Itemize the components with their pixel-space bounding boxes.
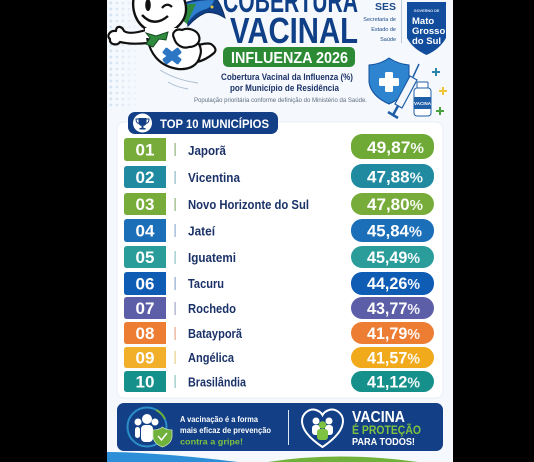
row 03: 47,80% [367, 195, 423, 214]
row 09: Angélica [188, 351, 235, 365]
left arm and hand [108, 27, 148, 44]
row 04: Jateí [188, 224, 215, 238]
row 01: 49,87% [367, 138, 424, 157]
row 01: Japorã [188, 144, 226, 158]
title: VACINAL [230, 10, 358, 51]
row 06: Tacuru [188, 277, 224, 291]
scarf [146, 32, 168, 47]
text: vacina e protecao para todos [352, 409, 421, 448]
cross on belly [162, 47, 182, 65]
row 05 [124, 246, 434, 268]
row 06 [124, 272, 434, 295]
text: vaccination message: A vacinação é a forma [180, 415, 259, 424]
row 08: 08 [136, 324, 154, 343]
text: vaccination message [180, 415, 271, 446]
row 04: 04 [136, 222, 155, 240]
row 09: 41,57% [367, 348, 420, 368]
section heading: top 10 municipios [128, 112, 278, 134]
SES logo text: Estado de [371, 27, 396, 33]
row 05: Iguatemi [188, 251, 236, 265]
row 10: 41,12% [367, 372, 420, 392]
mascot: flying vaccine drop [108, 0, 225, 89]
row 01: 01 [136, 140, 154, 160]
badge: influenza 2026: INFLUENZA 2026 [231, 50, 348, 67]
row 07: 43,77% [367, 299, 420, 318]
panel: ranking card [117, 122, 443, 398]
right foot [190, 44, 215, 62]
row 05: 45,49% [367, 248, 420, 267]
government shield [407, 2, 446, 55]
row 08 [124, 322, 434, 344]
text: vacina e protecao para todos: É PROTEÇÃO [352, 422, 421, 437]
subtitle [221, 72, 353, 94]
icon: shield, syringe and vial: VACINA [414, 101, 432, 106]
row 09: 09 [136, 348, 154, 368]
title [223, 0, 358, 51]
row 08: 41,79% [367, 324, 420, 343]
row 03: 03 [136, 195, 154, 214]
icon: shield, syringe and vial [369, 58, 432, 118]
note: População prioritária conforme definição do Ministério da Saúde. [194, 97, 367, 104]
section heading: top 10 municipios: TOP 10 MUNICÍPIOS [160, 116, 269, 131]
government shield: do Sul [412, 36, 441, 47]
government shield: GOVERNO DE [414, 9, 440, 13]
text: vaccination message: mais eficaz de prevenção [180, 426, 271, 435]
row 02: 47,88% [367, 168, 423, 186]
row 02: 02 [136, 168, 154, 187]
body [148, 34, 201, 69]
row 02: Vicentina [188, 171, 241, 185]
row 10 [124, 371, 434, 392]
footer banner [117, 403, 443, 451]
row 07: 07 [136, 299, 154, 318]
cape [182, 0, 225, 26]
subtitle: por Município de Residência [230, 83, 340, 94]
row 04: 45,84% [367, 222, 422, 240]
text: vacina e protecao para todos: VACINA [352, 409, 405, 426]
government shield: Mato [412, 16, 434, 27]
head [133, 0, 186, 32]
motion lines [160, 70, 198, 89]
decorative plus signs [432, 68, 447, 115]
row 06: 06 [136, 274, 154, 294]
icon: trophy [133, 114, 152, 132]
row 03 [124, 193, 434, 215]
row 07 [124, 297, 434, 319]
SES logo text: Secretaria de [363, 17, 396, 23]
subtitle: Cobertura Vacinal da Influenza (%) [221, 72, 353, 83]
bottom waves [107, 452, 418, 462]
row 06: 44,26% [367, 274, 420, 293]
SES logo text: SES [375, 1, 396, 13]
row 08: Batayporã [188, 327, 242, 341]
row 07: Rochedo [188, 302, 236, 316]
row 05: 05 [136, 248, 154, 267]
poster background [107, 0, 453, 462]
SES logo text: Saúde [380, 37, 396, 43]
text: vaccination message: contra a gripe! [180, 436, 243, 446]
face [145, 0, 151, 11]
row 10: 10 [136, 372, 154, 392]
row 03: Novo Horizonte do Sul [188, 198, 309, 212]
row 01 [124, 134, 434, 161]
row 09 [124, 347, 434, 368]
row 04 [124, 219, 434, 242]
icon: heart with family [302, 410, 343, 447]
SES logo text [363, 1, 396, 43]
icon: people with shield [128, 408, 172, 447]
row 10: Brasilândia [188, 376, 247, 390]
row 02 [124, 164, 434, 188]
right arm [173, 29, 199, 48]
government shield: Grosso [412, 26, 445, 37]
text: vacina e protecao para todos: PARA TODOS! [352, 437, 415, 448]
